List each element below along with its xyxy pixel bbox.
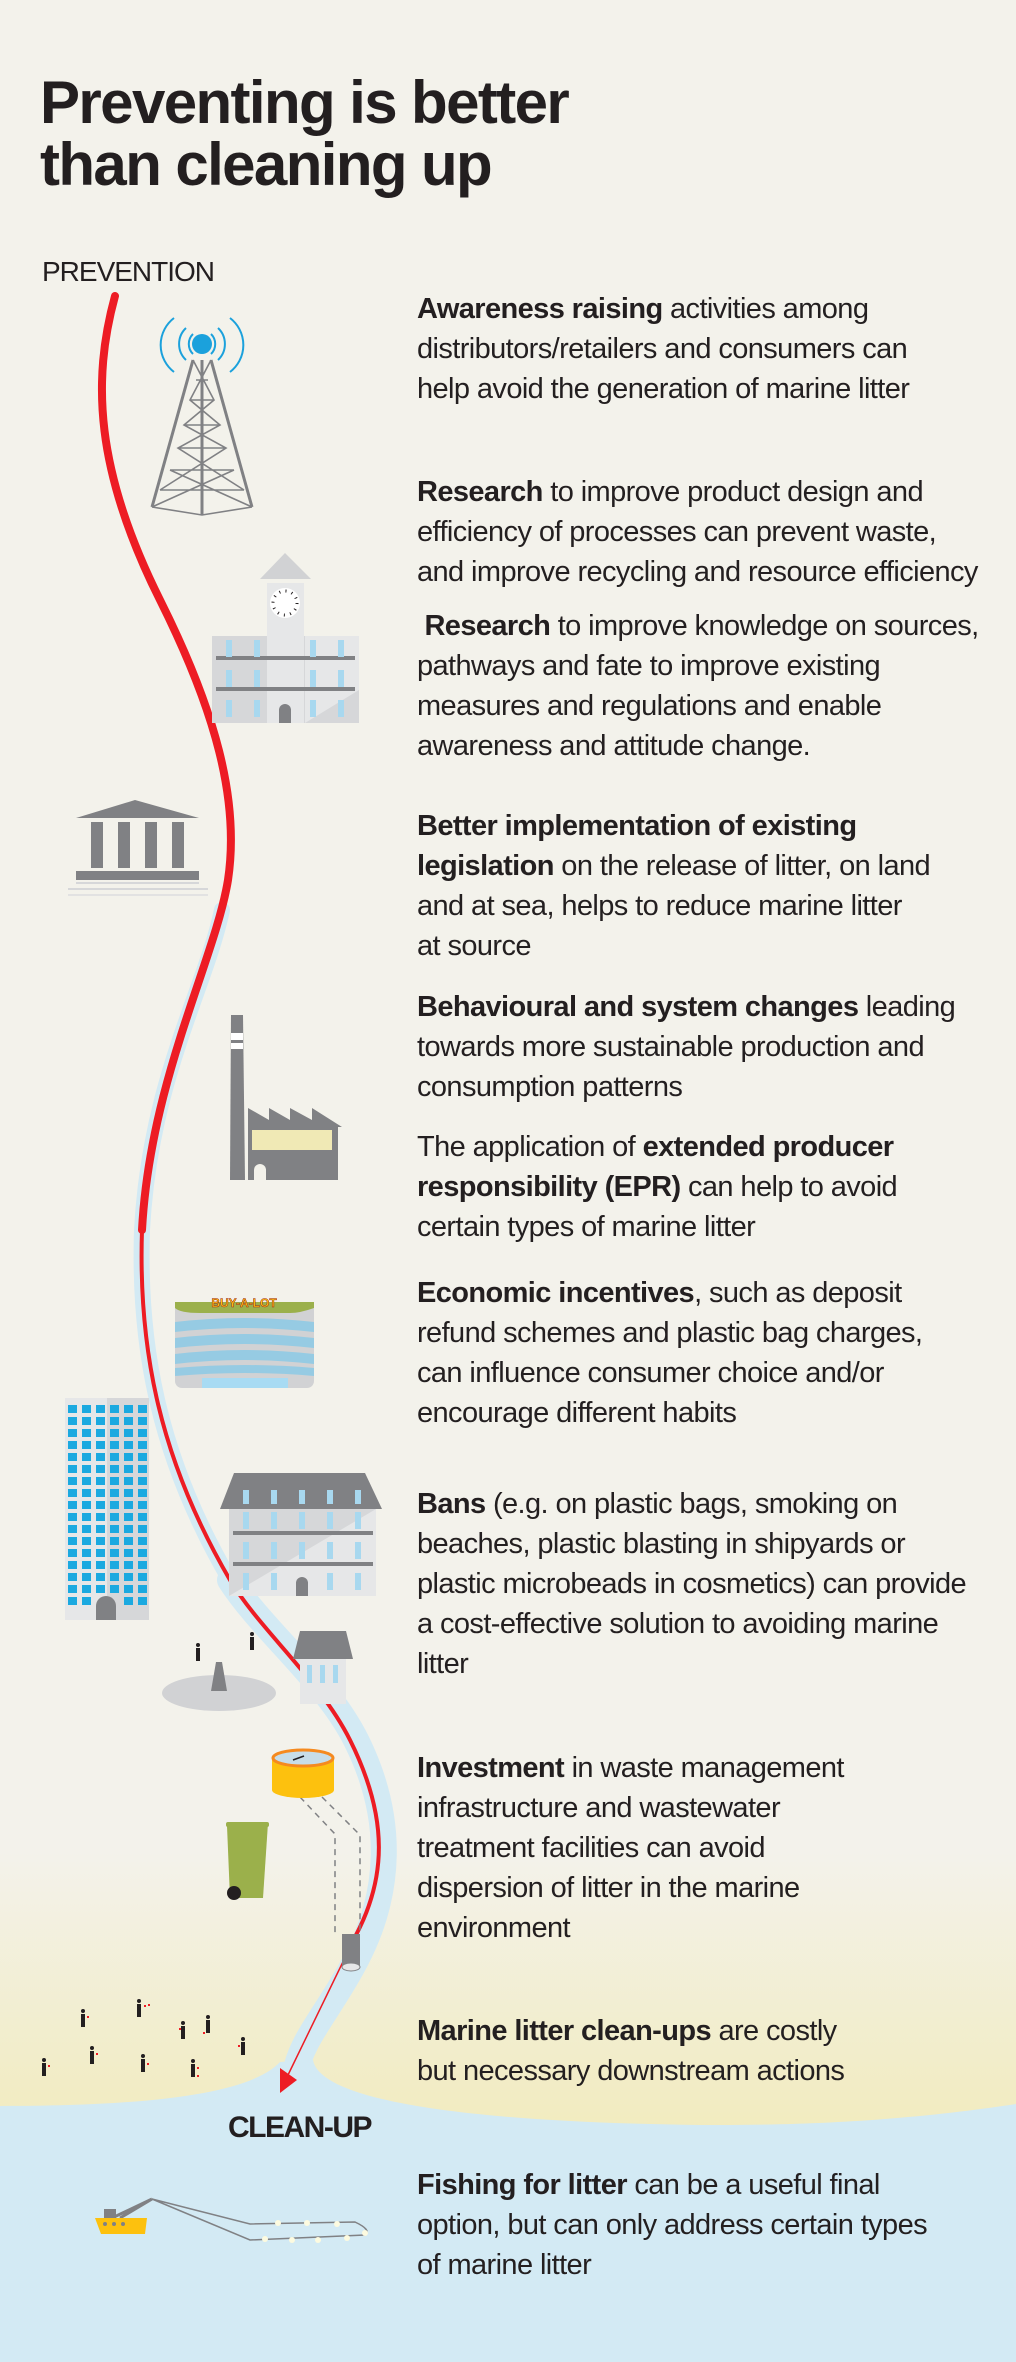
icon: BUY-A-LOT shop bbox=[175, 1296, 314, 1388]
icon: people on beach bbox=[42, 1999, 245, 2077]
icon: green bin bbox=[226, 1822, 269, 1900]
red line arrow bbox=[102, 296, 379, 2093]
title bbox=[40, 69, 569, 198]
icon: town hall bbox=[212, 553, 359, 723]
icon: temple bbox=[68, 800, 208, 896]
icon: BUY-A-LOT shop: BUY-A-LOT bbox=[211, 1296, 277, 1310]
text: research product design: Research to improve product design and bbox=[417, 476, 923, 508]
icon: radio tower bbox=[152, 318, 252, 515]
text: research product design bbox=[417, 476, 978, 588]
text: economic incentives: can influence consumer choice and/or bbox=[417, 1357, 884, 1389]
text: clean-ups bbox=[417, 2015, 844, 2087]
text: fishing for litter: option, but can only address certain types bbox=[417, 2209, 927, 2241]
text: research product design: and improve recycling and resource efficiency bbox=[417, 556, 978, 588]
text: clean-ups: Marine litter clean-ups are costly bbox=[417, 2015, 837, 2047]
icon: people in town bbox=[196, 1632, 254, 1661]
text: bans: beaches, plastic blasting in shipyards or bbox=[417, 1528, 905, 1560]
text: economic incentives: Economic incentives, such as deposit bbox=[417, 1277, 902, 1309]
text: fishing for litter bbox=[417, 2169, 927, 2281]
text: investment: infrastructure and wastewater bbox=[417, 1792, 780, 1824]
icon: small house bbox=[293, 1631, 353, 1704]
text: behavioural: towards more sustainable production and bbox=[417, 1031, 924, 1063]
text: clean-ups: but necessary downstream actions bbox=[417, 2055, 844, 2087]
text: legislation bbox=[417, 810, 930, 962]
text: awareness raising: help avoid the generation of marine litter bbox=[417, 373, 909, 405]
label: clean-up: CLEAN-UP bbox=[228, 2111, 371, 2144]
text: EPR: certain types of marine litter bbox=[417, 1211, 755, 1243]
icon: fishing boat with net bbox=[95, 2199, 368, 2243]
text: awareness raising bbox=[417, 293, 910, 405]
text: legislation: and at sea, helps to reduce marine litter bbox=[417, 890, 902, 922]
icon: wastewater tank bbox=[272, 1750, 334, 1798]
text: investment: treatment facilities can avoid bbox=[417, 1832, 765, 1864]
text: bans bbox=[417, 1488, 966, 1680]
text: bans: plastic microbeads in cosmetics) can provide bbox=[417, 1568, 966, 1600]
text: economic incentives: refund schemes and plastic bag charges, bbox=[417, 1317, 922, 1349]
text: bans: a cost-effective solution to avoiding marine bbox=[417, 1608, 938, 1640]
text: research knowledge: pathways and fate to improve existing bbox=[417, 650, 880, 682]
text: economic incentives bbox=[417, 1277, 922, 1429]
text: behavioural bbox=[417, 991, 955, 1103]
text: behavioural: consumption patterns bbox=[417, 1071, 682, 1103]
text: legislation: at source bbox=[417, 930, 531, 962]
text: behavioural: Behavioural and system changes leading bbox=[417, 991, 955, 1023]
text: research knowledge bbox=[417, 610, 979, 762]
text: awareness raising: distributors/retailers and consumers can bbox=[417, 333, 907, 365]
icon: hotel building bbox=[220, 1473, 382, 1596]
text: investment bbox=[417, 1752, 844, 1944]
icon: factory bbox=[230, 1015, 342, 1180]
text: research product design: efficiency of processes can prevent waste, bbox=[417, 516, 936, 548]
icon: dashed pipes bbox=[300, 1797, 360, 1935]
text: research knowledge: measures and regulations and enable bbox=[417, 690, 881, 722]
title: than cleaning up bbox=[40, 131, 491, 198]
text: EPR: responsibility (EPR) can help to avoid bbox=[417, 1171, 897, 1203]
text: research knowledge: awareness and attitude change. bbox=[417, 730, 810, 762]
sea bbox=[0, 2060, 1016, 2362]
text: legislation: Better implementation of existing bbox=[417, 810, 856, 842]
text: bans: Bans (e.g. on plastic bags, smoking on bbox=[417, 1488, 897, 1520]
text: bans: litter bbox=[417, 1648, 468, 1680]
label: prevention: PREVENTION bbox=[42, 256, 214, 287]
text: investment: environment bbox=[417, 1912, 570, 1944]
text: EPR bbox=[417, 1131, 897, 1243]
title: Preventing is better bbox=[40, 69, 568, 136]
text: research knowledge: Research to improve knowledge on sources, bbox=[424, 610, 979, 642]
text: awareness raising: Awareness raising activities among bbox=[417, 293, 868, 325]
text: investment: Investment in waste management bbox=[417, 1752, 844, 1784]
text: fishing for litter: of marine litter bbox=[417, 2249, 591, 2281]
text: legislation: legislation on the release of litter, on land bbox=[417, 850, 930, 882]
icon: plaza with statue bbox=[162, 1662, 276, 1711]
river band bbox=[142, 910, 384, 2075]
icon: tall tower bbox=[65, 1398, 149, 1620]
text: EPR: The application of extended producer bbox=[417, 1131, 893, 1163]
text: economic incentives: encourage different habits bbox=[417, 1397, 736, 1429]
text: investment: dispersion of litter in the marine bbox=[417, 1872, 800, 1904]
text: fishing for litter: Fishing for litter can be a useful final bbox=[417, 2169, 880, 2201]
icon: pipe outlet bbox=[342, 1934, 360, 1971]
